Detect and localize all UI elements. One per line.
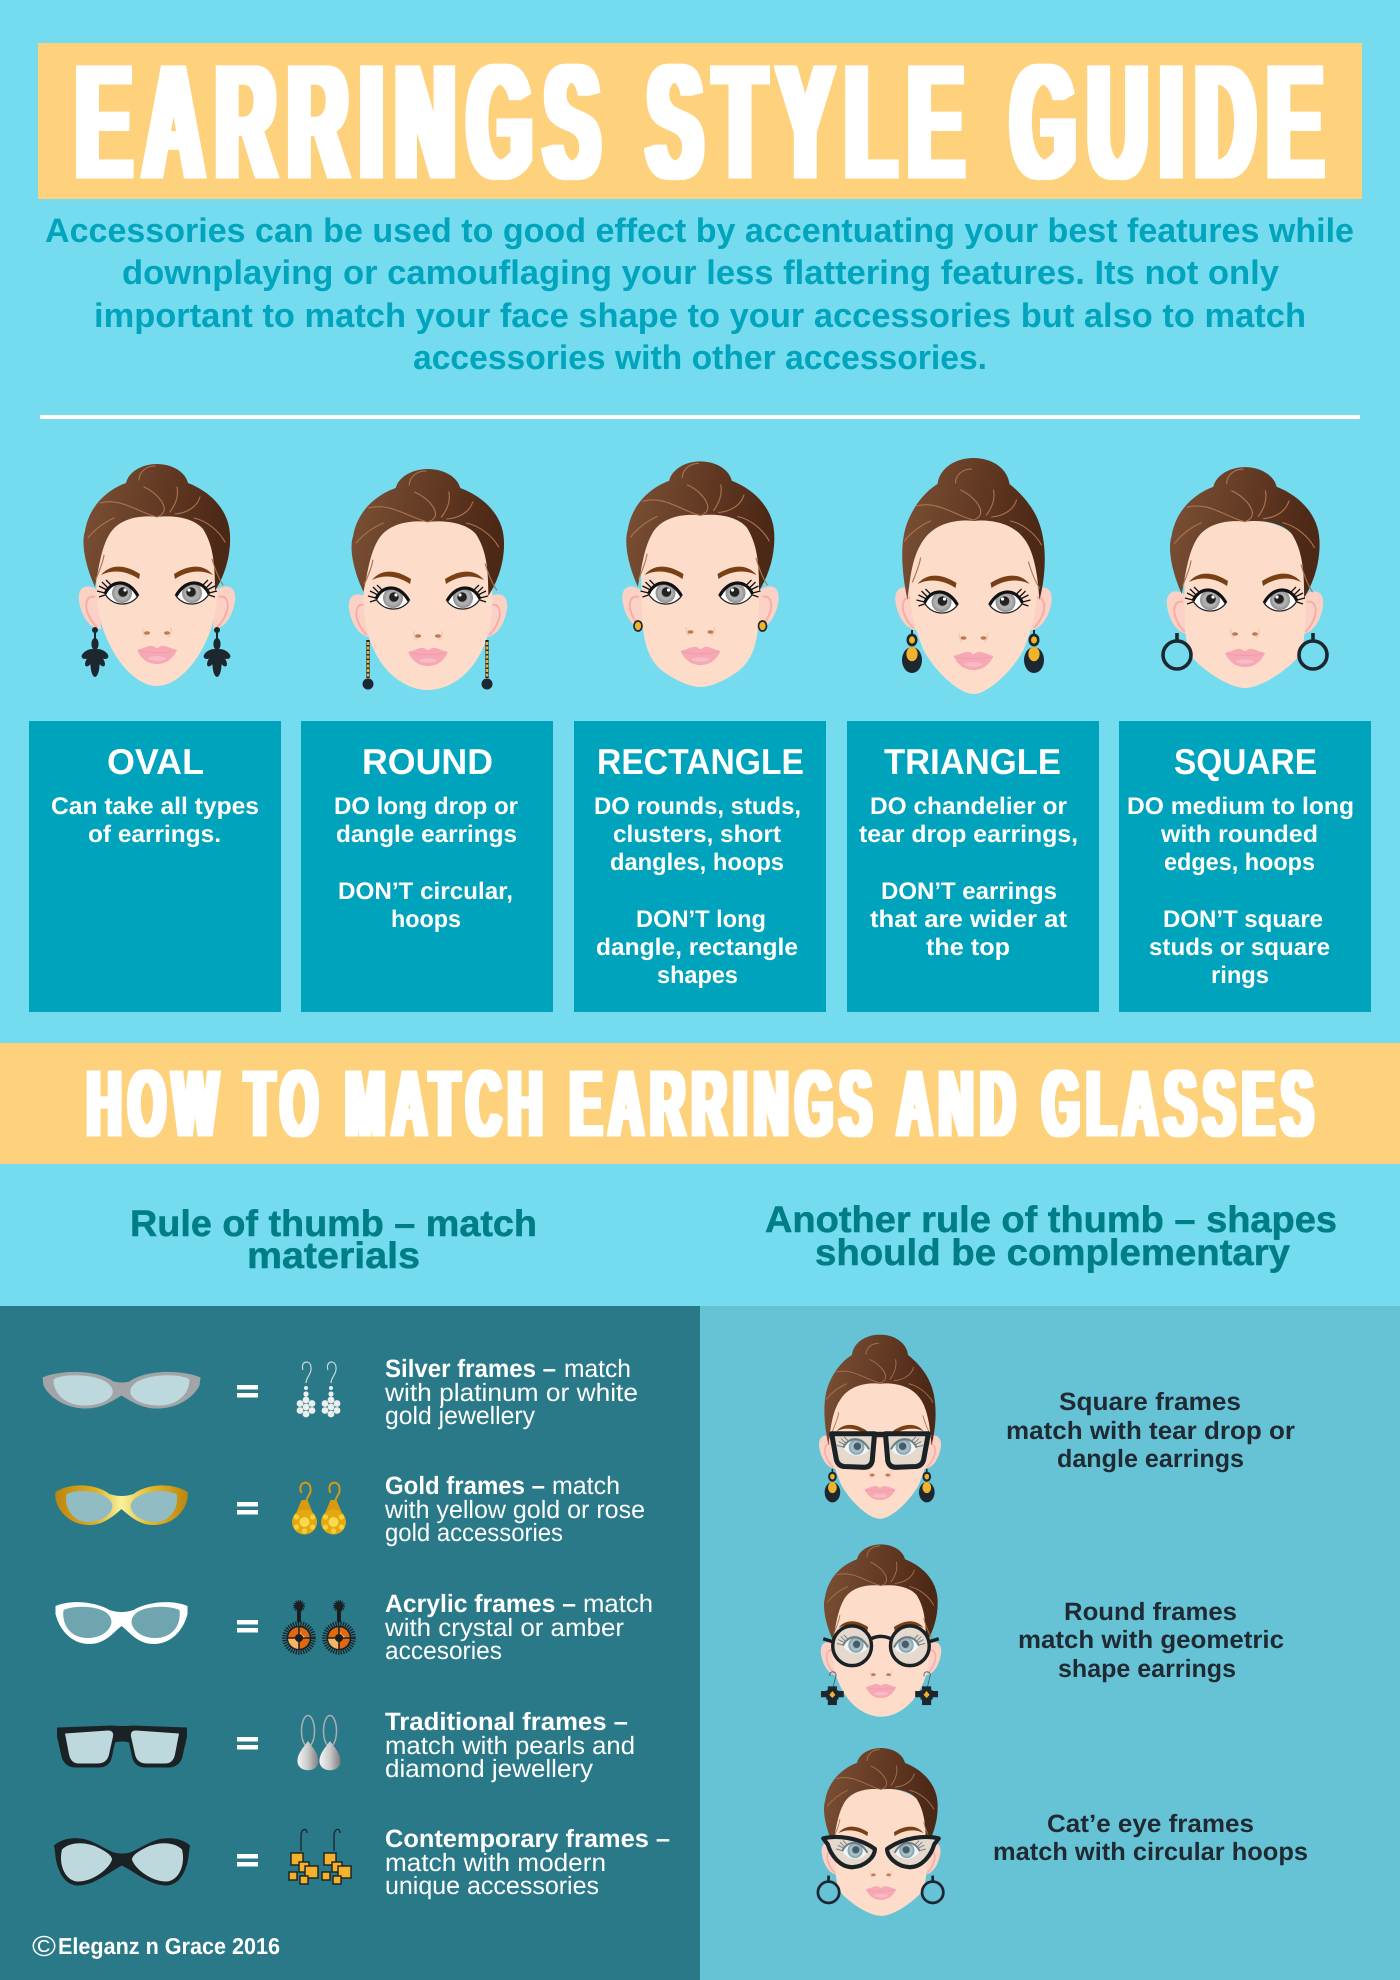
round advice: DO long drop or [334, 793, 518, 820]
square advice: with rounded [1160, 821, 1318, 848]
subheading: shapes: Another rule of thumb – shapes [765, 1199, 1337, 1240]
rectangle advice: dangles, hoops [610, 849, 784, 876]
triangle advice: the top [926, 934, 1010, 961]
rectangle advice: DO rounds, studs, [594, 793, 801, 820]
text: contemporary frames: Contemporary frames – [385, 1825, 670, 1853]
rectangle advice: clusters, short [613, 821, 781, 848]
square advice: rings [1211, 962, 1269, 989]
round advice [334, 793, 518, 933]
row: acrylic frames [56, 1590, 653, 1665]
copyright: © [32, 1931, 56, 1963]
row: gold frames [55, 1472, 645, 1547]
icon: silver glasses [42, 1372, 200, 1408]
text: silver frames [384, 1355, 638, 1430]
text: acrylic frames [384, 1590, 653, 1665]
panel: round [301, 721, 553, 1012]
triangle advice: tear drop earrings, [859, 821, 1078, 848]
text: gold frames: gold accessories [385, 1519, 563, 1547]
text: cat eye frames [993, 1810, 1308, 1866]
text: traditional frames: diamond jewellery [385, 1755, 594, 1783]
subheading: shapes [765, 1199, 1337, 1273]
section heading: HOW TO MATCH EARRINGS AND GLASSES [87, 1051, 1313, 1157]
heading: triangle: TRIANGLE [884, 741, 1061, 782]
rectangle advice: DON’T long [636, 906, 766, 933]
intro paragraph [45, 212, 1354, 377]
square advice: studs or square [1149, 934, 1330, 961]
triangle advice: DO chandelier or [870, 793, 1067, 820]
copyright: Eleganz n Grace 2016 [58, 1933, 280, 1959]
text: gold frames: Gold frames – [385, 1472, 545, 1500]
intro paragraph: important to match your face shape to your accessories but also to match [94, 297, 1306, 335]
face: square frames [819, 1335, 941, 1519]
panel: rectangle [574, 721, 826, 1012]
oval advice: of earrings. [88, 821, 221, 848]
text: traditional frames: Traditional frames – [385, 1708, 628, 1736]
subheading: shapes: should be complementary [815, 1232, 1290, 1273]
icon: equals [237, 1385, 258, 1398]
text: silver frames: with platinum or white [384, 1379, 638, 1407]
text: round frames: shape earrings [1058, 1655, 1236, 1683]
icon: white glasses [56, 1602, 188, 1644]
text: gold frames: match [552, 1472, 620, 1500]
text: square frames: Square frames [1059, 1388, 1241, 1416]
panel: triangle [847, 721, 1099, 1012]
face: round frames [821, 1544, 941, 1717]
icon: cube earrings [289, 1829, 351, 1884]
heading: rectangle: RECTANGLE [597, 741, 804, 782]
face: cat eye frames [818, 1748, 943, 1916]
square advice: DO medium to long [1127, 793, 1354, 820]
icon: equals [237, 1737, 258, 1750]
icon: black square glasses [57, 1726, 187, 1768]
square advice: edges, hoops [1164, 849, 1315, 876]
intro paragraph: accessories with other accessories. [413, 339, 987, 377]
icon: pearl earrings [297, 1716, 341, 1770]
face: round with chain earrings [349, 469, 507, 690]
text: silver frames: match [564, 1355, 631, 1383]
rectangle advice [594, 793, 801, 989]
text: cat eye frames: match with circular hoops [993, 1838, 1308, 1866]
text: traditional frames [385, 1708, 635, 1783]
round advice: dangle earrings [336, 821, 517, 848]
subheading: materials: materials [247, 1235, 420, 1276]
text: square frames [1006, 1388, 1295, 1473]
text: square frames: dangle earrings [1057, 1445, 1244, 1473]
icon: gold glasses [55, 1485, 188, 1525]
oval advice: Can take all types [51, 793, 259, 820]
triangle advice [859, 793, 1078, 961]
panel: shapes [700, 1306, 1400, 1980]
rectangle advice: dangle, rectangle [596, 934, 798, 961]
title banner [38, 31, 1362, 214]
oval advice [51, 793, 259, 848]
text: gold frames: with yellow gold or rose [384, 1496, 645, 1524]
intro paragraph: downplaying or camouflaging your less flattering features. Its not only [122, 254, 1279, 292]
icon: gold earrings [292, 1483, 346, 1534]
row: silver frames [42, 1355, 638, 1430]
text: traditional frames: match with pearls and [385, 1732, 635, 1760]
text: acrylic frames: match [583, 1590, 653, 1618]
rectangle advice: shapes [657, 962, 738, 989]
text: contemporary frames: unique accessories [385, 1872, 599, 1900]
face: square with hoop earrings [1163, 467, 1327, 688]
subheading: materials [130, 1203, 537, 1276]
text: square frames: match with tear drop or [1006, 1417, 1295, 1445]
text: contemporary frames: match with modern [385, 1849, 606, 1877]
face: oval with leaf earrings [79, 464, 235, 686]
heading: oval: OVAL [107, 741, 204, 782]
text: contemporary frames [385, 1825, 670, 1900]
round advice: DON’T circular, [338, 878, 513, 905]
heading: round: ROUND [362, 741, 493, 782]
icon: butterfly glasses [54, 1838, 190, 1886]
panel: oval [29, 721, 281, 1012]
icon: silver earrings [297, 1362, 340, 1417]
text: acrylic frames: with crystal or amber [384, 1614, 624, 1642]
square advice [1127, 793, 1354, 989]
section banner [0, 1043, 1400, 1164]
icon: equals [237, 1854, 258, 1866]
icon: amber earrings [285, 1602, 353, 1652]
text: gold frames [384, 1472, 645, 1547]
heading: square: SQUARE [1174, 741, 1317, 782]
title text: EARRINGS STYLE GUIDE [76, 31, 1323, 214]
triangle advice: DON’T earrings [881, 878, 1057, 905]
text: round frames: match with geometric [1018, 1626, 1284, 1654]
triangle advice: that are wider at [870, 906, 1067, 933]
icon: equals [237, 1502, 258, 1514]
face: triangle with tear drop earrings [895, 458, 1052, 694]
text: round frames: Round frames [1064, 1598, 1237, 1626]
text: cat eye frames: Cat’e eye frames [1047, 1810, 1254, 1838]
panel: square [1119, 721, 1371, 1012]
subheading: materials: Rule of thumb – match [130, 1203, 537, 1244]
row: contemporary frames [54, 1825, 670, 1900]
copyright [32, 1931, 280, 1963]
round advice: hoops [391, 906, 461, 933]
face: rectangle with stud earrings [622, 461, 779, 687]
text: silver frames: Silver frames – [385, 1355, 556, 1383]
icon: equals [237, 1620, 258, 1632]
square advice: DON’T square [1163, 906, 1323, 933]
panel: materials [0, 1306, 700, 1980]
text: acrylic frames: Acrylic frames – [385, 1590, 576, 1618]
intro paragraph: Accessories can be used to good effect by accentuating your best features while [45, 212, 1354, 250]
text: acrylic frames: accesories [385, 1637, 502, 1665]
row: traditional frames [57, 1708, 635, 1783]
text: silver frames: gold jewellery [385, 1402, 535, 1430]
text: round frames [1018, 1598, 1284, 1683]
